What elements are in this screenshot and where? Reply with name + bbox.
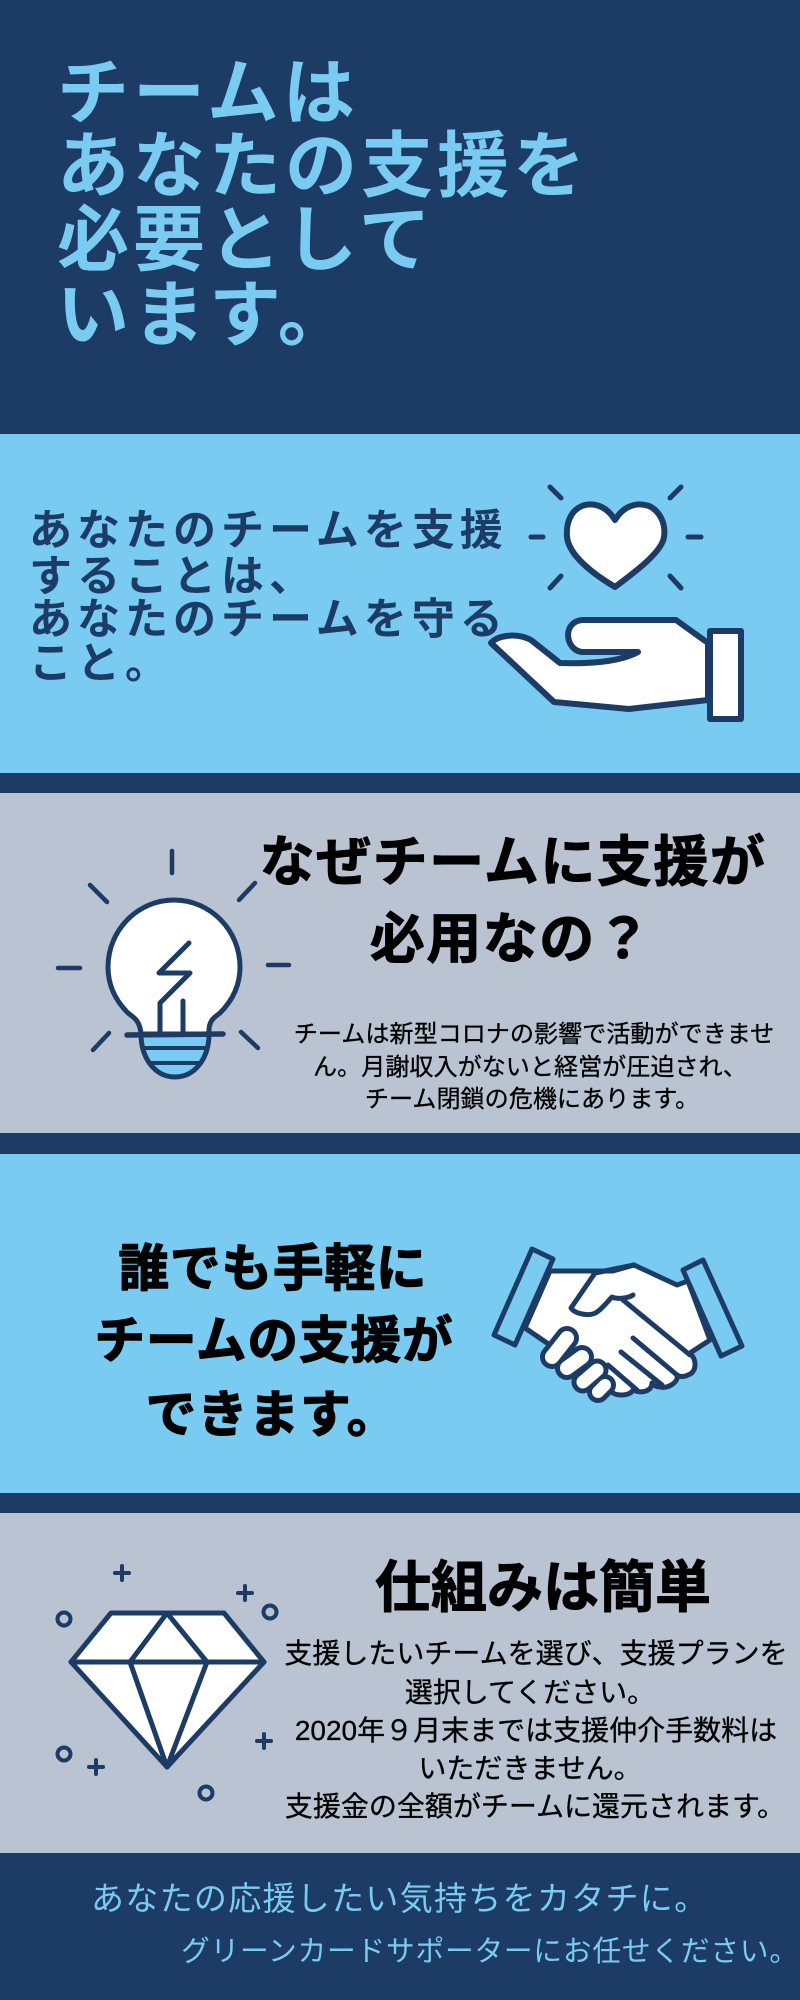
panel: how it works <box>0 1513 800 1853</box>
panel heading <box>94 1240 454 1443</box>
left cuff <box>494 1249 553 1345</box>
panel heading: チームの支援が <box>94 1312 454 1369</box>
footer: あなたの応援したい気持ちをカタチに。 <box>91 1880 708 1917</box>
base bar <box>127 1034 223 1035</box>
icon: handshake <box>494 1249 742 1395</box>
panel heading: することは、 <box>29 553 317 601</box>
diamond body <box>71 1613 264 1767</box>
panel heading <box>260 831 766 970</box>
panel background <box>0 793 800 1133</box>
diamond facets <box>71 1613 264 1767</box>
bulb base <box>141 1034 209 1077</box>
sparkles <box>58 1566 276 1800</box>
panel body text: 支援したいチームを選び、支援プランを <box>284 1638 788 1669</box>
icon: cuff <box>710 631 741 719</box>
panel body text: 2020年９月末までは支援仲介手数料は <box>295 1715 777 1746</box>
panel: anyone can support <box>0 1154 800 1493</box>
panel body text: 選択してください。 <box>405 1677 655 1708</box>
panel: why support is needed <box>0 793 800 1133</box>
panel heading: こと。 <box>29 640 173 688</box>
right cuff <box>683 1260 742 1356</box>
bulb rays <box>58 851 289 1050</box>
panel body text: ん。月謝収入がないと経営が圧迫され、 <box>313 1054 747 1081</box>
title <box>57 54 589 356</box>
panel heading: あなたのチームを守る <box>29 596 508 644</box>
panel heading: あなたのチームを支援 <box>29 507 508 555</box>
bulb glass <box>108 900 240 1034</box>
base stripes <box>143 1048 207 1063</box>
panel heading: 仕組みは簡単 <box>375 1556 711 1619</box>
panel heading <box>29 507 508 688</box>
title: 必要として <box>57 201 435 281</box>
left hand fingers <box>552 1338 605 1392</box>
icon: heart <box>567 504 664 587</box>
panel background <box>0 434 800 773</box>
title: います。 <box>57 276 354 356</box>
footer: グリーンカードサポーターにお任せください。 <box>181 1936 799 1968</box>
thumb and finger lines <box>571 1265 690 1390</box>
footer <box>91 1880 799 1968</box>
panel heading: できます。 <box>146 1386 398 1443</box>
panel body text: いただきません。 <box>418 1753 642 1784</box>
panel background <box>0 1513 800 1853</box>
icon: open hand <box>491 620 708 709</box>
icon: diamond <box>58 1566 276 1800</box>
heart rays <box>531 487 701 588</box>
icon: heart in hand <box>491 487 741 719</box>
panel body text: 支援金の全額がチームに還元されます。 <box>285 1791 785 1822</box>
icon: light bulb <box>58 851 289 1077</box>
panel heading: なぜチームに支援が <box>260 831 766 893</box>
title: チームは <box>57 54 359 134</box>
filament <box>159 943 190 1033</box>
panel body text <box>294 1021 774 1113</box>
title: あなたの支援を <box>57 127 589 207</box>
panel: protect your team <box>0 434 800 773</box>
hands <box>525 1265 710 1395</box>
panel background <box>0 1154 800 1493</box>
panel body text: チーム閉鎖の危機にあります。 <box>365 1086 699 1113</box>
panel body text: チームは新型コロナの影響で活動ができませ <box>294 1021 774 1048</box>
panel heading: 誰でも手軽に <box>118 1240 428 1297</box>
panel heading: 必用なの？ <box>370 908 652 970</box>
panel body text <box>284 1638 788 1822</box>
